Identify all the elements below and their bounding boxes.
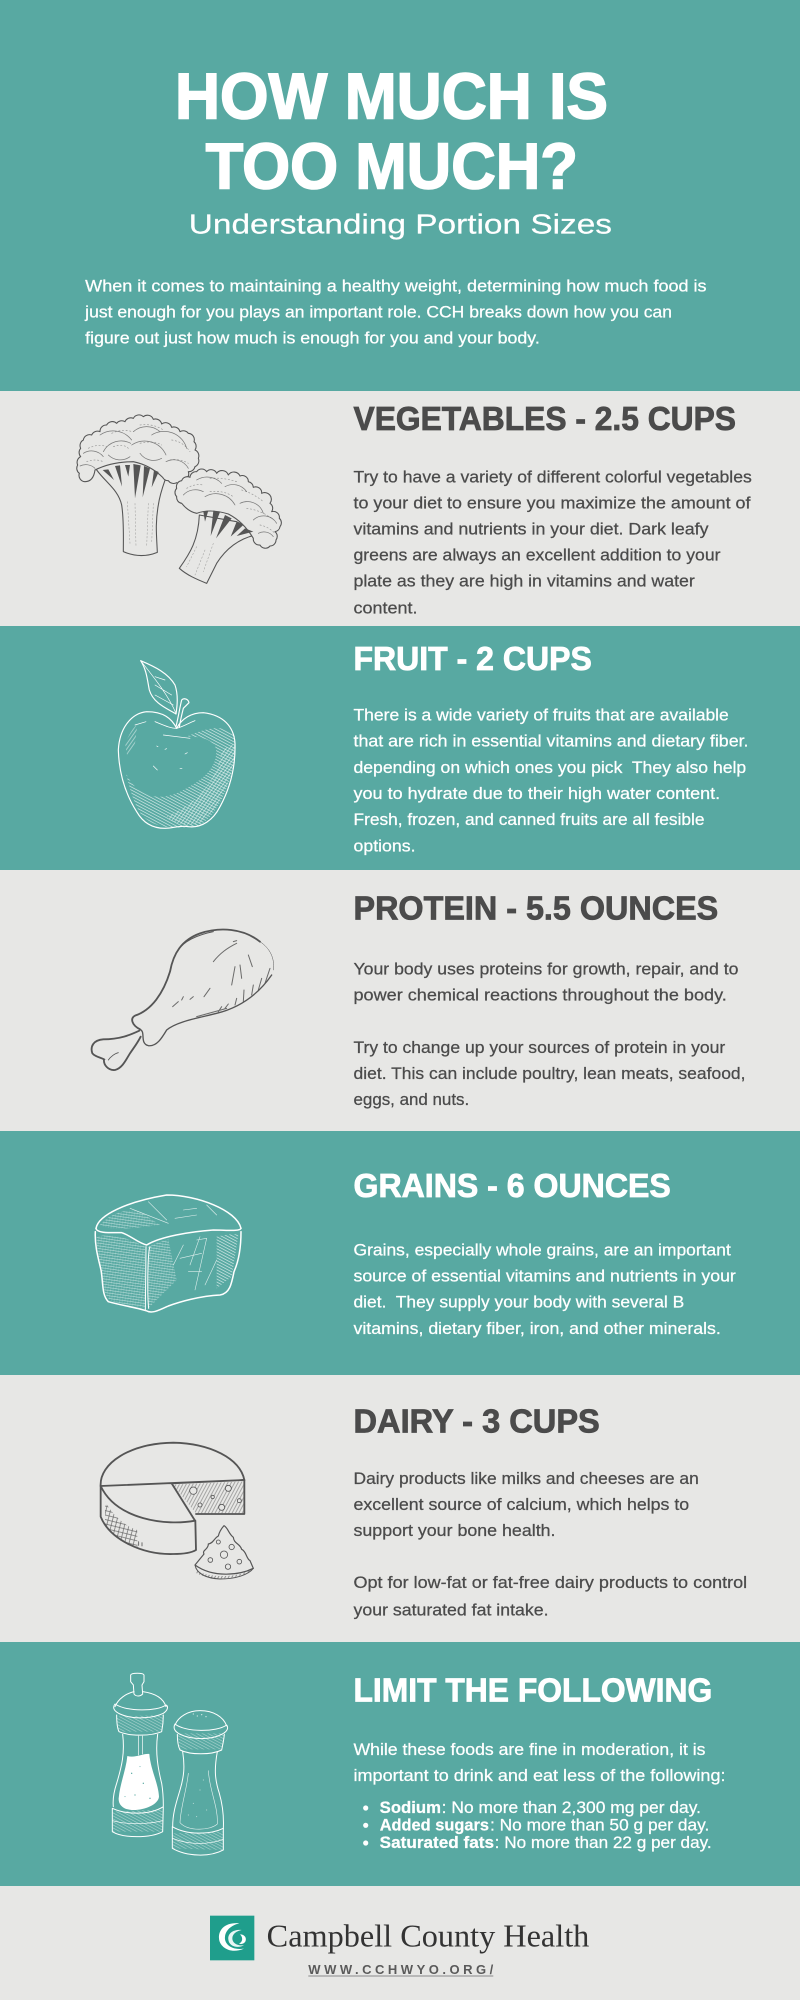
title: TOO MUCH? [206,129,578,202]
body text: excellent source of calcium, which helps to [354,1496,689,1514]
body text: greens are always an excellent addition to your [354,547,721,565]
body text: diet. This can include poultry, lean meats, seafood, [354,1065,746,1083]
logo wordmark: Campbell County Health [267,1918,589,1954]
bullet list: : No more than 2,300 mg per day. [442,1799,701,1817]
body text: While these foods are fine in moderation, it is [354,1741,706,1759]
body text: support your bone health. [354,1522,556,1540]
bullet list: Added sugars [380,1816,489,1834]
body text: to your diet to ensure you maximize the amount of [354,495,751,513]
icon: apple [118,661,235,828]
bullet list: : No more than 50 g per day. [490,1816,709,1834]
heading: FRUIT - 2 CUPS [354,640,592,677]
body text: diet. They supply your body with several B [354,1293,684,1311]
heading: DAIRY - 3 CUPS [354,1402,600,1439]
bullet list: : No more than 22 g per day. [495,1834,712,1852]
body text: Grains, especially whole grains, are an important [354,1241,731,1259]
body text [354,960,746,1109]
panel: dairy [0,1375,800,1642]
heading: GRAINS - 6 OUNCES [354,1167,671,1204]
bullet list [363,1799,712,1852]
body text [354,1741,726,1785]
panel: header [0,0,800,391]
body text: content. [354,599,418,617]
body text: depending on which ones you pick They also help [354,759,746,777]
body text: There is a wide variety of fruits that are available [354,706,729,724]
body text: plate as they are high in vitamins and water [354,573,695,591]
title [175,59,608,202]
body text: you to hydrate due to their high water content. [354,785,720,803]
body text: eggs, and nuts. [354,1091,469,1109]
body text: Opt for low-fat or fat-free dairy products to control [354,1574,747,1592]
icon: salt and pepper shakers [112,1673,228,1855]
body text: Fresh, frozen, and canned fruits are all fesible [354,811,704,829]
panel: limit the following [0,1642,800,1886]
bullet list: Sodium [380,1799,441,1817]
panel: grains [0,1131,800,1375]
panel: fruit [0,626,800,870]
body text: Your body uses proteins for growth, repair, and to [354,960,738,978]
title: HOW MUCH IS [175,59,608,132]
website link: WWW.CCHWYO.ORG/ [308,1962,494,1977]
body text: power chemical reactions throughout the body. [354,986,727,1004]
body text: Dairy products like milks and cheeses are an [354,1470,699,1488]
panel: vegetables [0,391,800,626]
heading: PROTEIN - 5.5 OUNCES [354,889,718,926]
panel: footer [0,1886,800,2000]
body text [354,469,752,617]
body text: options. [354,837,416,855]
icon: cheese wheel [101,1443,253,1579]
intro text [84,278,707,348]
intro text: just enough for you plays an important role. CCH breaks down how you can [84,304,672,322]
logo mark [210,1916,254,1960]
body text: your saturated fat intake. [354,1601,548,1619]
body text: Try to have a variety of different colorful vegetables [354,469,752,487]
intro text: figure out just how much is enough for you and your body. [85,330,540,348]
heading: LIMIT THE FOLLOWING [354,1672,712,1709]
panel: protein [0,870,800,1131]
body text: vitamins, dietary fiber, iron, and other minerals. [354,1320,721,1338]
body text [354,706,748,855]
icon: chicken drumstick [92,930,274,1070]
body text [354,1241,736,1338]
subtitle: Understanding Portion Sizes [189,208,612,239]
body text: source of essential vitamins and nutrients in your [354,1267,736,1285]
bullet list: Saturated fats [380,1834,494,1852]
icon: broccoli [77,415,281,583]
body text [354,1470,747,1619]
icon: bread loaf [95,1195,241,1312]
intro text: When it comes to maintaining a healthy weight, determining how much food is [85,278,707,296]
body text: vitamins and nutrients in your diet. Dark leafy [354,521,709,539]
body text: important to drink and eat less of the following: [354,1767,726,1785]
body text: Try to change up your sources of protein in your [354,1039,726,1057]
body text: that are rich in essential vitamins and dietary fiber. [354,733,748,751]
heading: VEGETABLES - 2.5 CUPS [354,400,736,437]
